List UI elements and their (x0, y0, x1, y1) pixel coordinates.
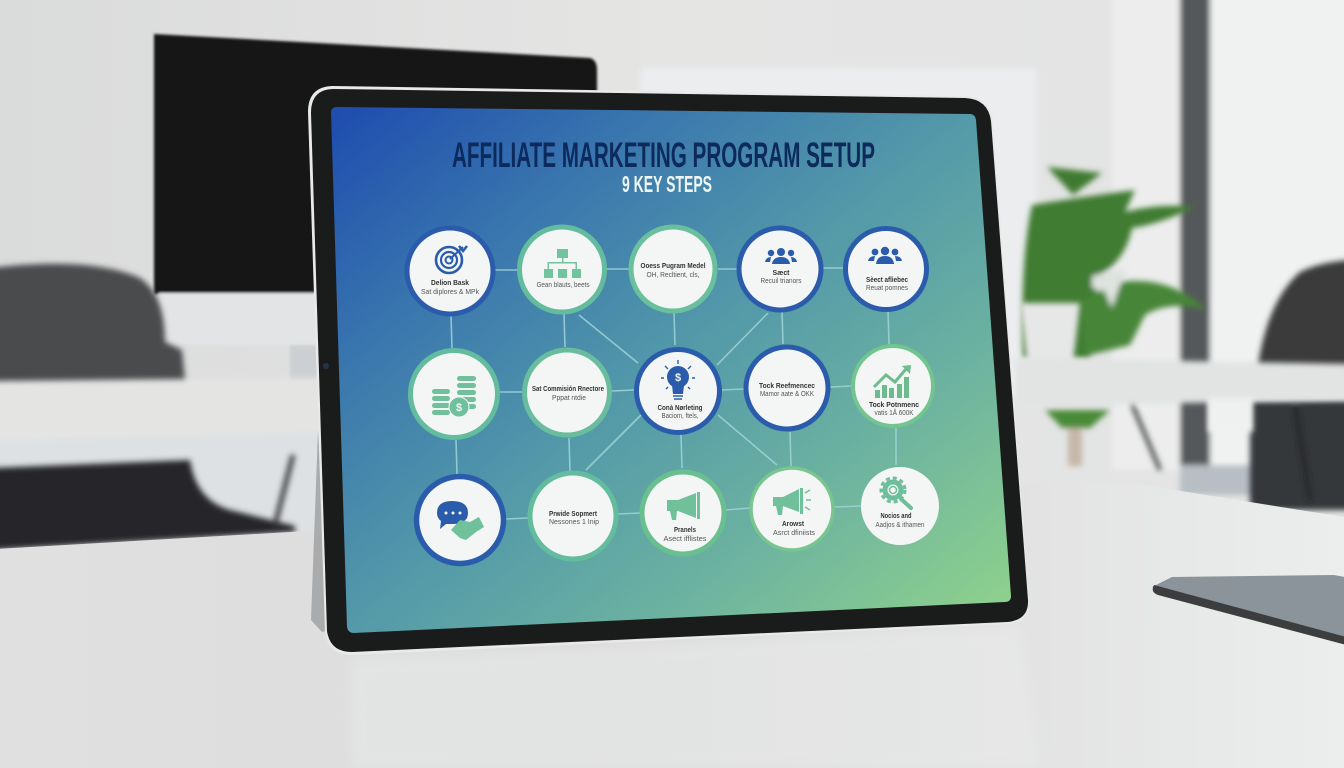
step: provide support: Nessones 1 Inip (549, 519, 599, 526)
icon glyph: dollar: $ (456, 402, 462, 414)
black monitor (154, 34, 597, 390)
subtitle: 9 KEY STEPS (622, 171, 712, 197)
left chair (0, 264, 295, 550)
label: Sat Commisión Rnectore (532, 384, 604, 393)
step: commission (524, 350, 610, 435)
label: Ooess Pugram Medel (640, 261, 706, 270)
step: promote (642, 472, 724, 554)
label: Pranels (674, 525, 696, 534)
step: track performance (746, 347, 828, 429)
step: select (739, 228, 821, 310)
plant (1022, 167, 1207, 466)
step: commission: Pppat ntdie (552, 395, 586, 402)
tablet screen (331, 107, 1011, 633)
tablet reflection on table (350, 628, 1040, 768)
label: Prwide Sopmert (549, 509, 597, 518)
tablet camera (323, 363, 329, 369)
right chair (1250, 260, 1344, 510)
icon: target (436, 246, 467, 273)
step: marketing (636, 350, 720, 432)
icon: org chart (544, 249, 581, 278)
step: select affiliates (846, 228, 926, 310)
rear desk left (0, 378, 325, 545)
step: provide support (530, 473, 616, 559)
step: promote affiliates (751, 468, 833, 550)
label: Tock Potnmenc (869, 400, 919, 409)
step: growth chart (853, 346, 933, 426)
window on the right (1112, 0, 1344, 495)
rear desk right (1015, 358, 1344, 500)
icon: megaphone (667, 492, 700, 520)
icon: rising bars (874, 365, 911, 398)
icon glyph: dollar in bulb: $ (675, 372, 681, 384)
step: marketing: Baciom, ftels, (662, 413, 699, 420)
icon: chat bubble and handshake (437, 501, 484, 540)
step: monitor and analyze: Aadjos & ithamen (876, 522, 925, 529)
label: Arowst (782, 519, 804, 528)
label: Sèect aflìebec (866, 275, 908, 284)
step: support chat (416, 476, 504, 564)
icon: gear and magnifier (881, 478, 911, 508)
step: coins (410, 350, 498, 438)
step: promote affiliates: Asrct dfiniists (773, 528, 815, 537)
tablet bezel (311, 89, 1028, 652)
icon: megaphone (773, 488, 811, 515)
table tablet dark (1152, 575, 1344, 646)
tablet device (308, 86, 1029, 655)
icon: people (868, 247, 902, 264)
label: Conà Nørleting (658, 403, 703, 412)
icon: coin stacks (432, 376, 476, 417)
label: Delion Bask (431, 278, 470, 287)
title: AFFILIATE MARKETING PROGRAM SETUP (452, 136, 875, 175)
step: define goals (407, 228, 493, 314)
tablet kickstand (311, 430, 330, 632)
icon: light bulb (661, 360, 695, 399)
step: track performance: Mamor aate & OKK (760, 391, 814, 398)
step: select: Recuil trianors (760, 278, 802, 285)
label: Sæct (772, 268, 790, 277)
step: select affiliates: Reuat pomnes (866, 285, 908, 292)
step: define goals: Sat diplores & MPk (421, 287, 479, 296)
tablet frame (308, 86, 1029, 655)
plant pot (1020, 303, 1080, 372)
step: choose program model (631, 227, 715, 311)
label: Tock Reefmencec (759, 381, 815, 390)
foreground table (0, 482, 1344, 768)
icon: people (765, 248, 797, 264)
connector lines (451, 268, 896, 519)
label: Nocios and (880, 511, 912, 520)
step: choose program model: OH, Recltient, cls, (646, 270, 700, 279)
step: promote: Asect ifflistes (664, 534, 707, 543)
label: Gean blauts, beets (536, 280, 590, 289)
step: monitor and analyze (861, 467, 939, 545)
screen content (407, 136, 939, 564)
step: growth chart: vatis 1Å 600K (874, 408, 914, 417)
step: organize (520, 227, 604, 312)
back of white monitor (640, 68, 1037, 398)
